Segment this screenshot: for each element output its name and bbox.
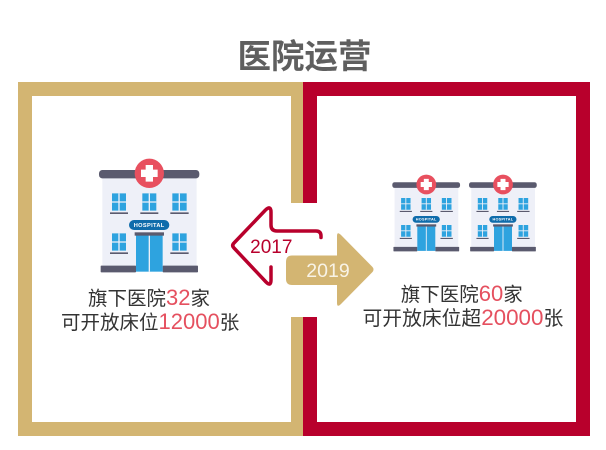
- text: 2017 beds: 可开放床位12000张: [61, 309, 239, 334]
- icon: hospital 2017: HOSPITAL: [134, 223, 165, 229]
- icon: hospital 2019 right: [469, 175, 537, 251]
- arrow: 2019: [286, 233, 374, 306]
- panel: 2017 frame: [18, 82, 303, 436]
- center gap: [285, 203, 323, 317]
- icon: hospital 2017: [99, 159, 199, 272]
- panel: 2019 frame: [303, 82, 590, 436]
- icon: hospital 2019 right: HOSPITAL: [492, 218, 514, 222]
- label: 2019: 2019: [306, 260, 350, 282]
- arrow: 2017: [233, 208, 321, 284]
- text: 2019 beds: 可开放床位超20000张: [362, 305, 563, 330]
- icon: hospital 2019 left: [392, 175, 460, 251]
- title: 医院运营: [238, 39, 372, 76]
- text: 2017 hospitals: 旗下医院32家: [88, 285, 210, 310]
- text: 2019 hospitals: 旗下医院60家: [401, 281, 523, 306]
- label: 2017: 2017: [250, 237, 292, 258]
- icon: hospital 2019 left: HOSPITAL: [416, 218, 437, 222]
